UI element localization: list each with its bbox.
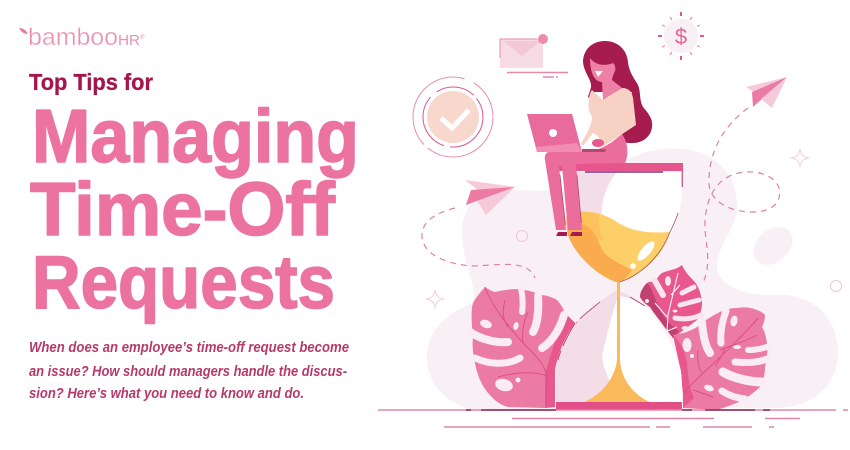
decorative rings and sparkles — [426, 149, 842, 308]
paper plane: left — [465, 180, 515, 215]
upper sand — [566, 212, 678, 282]
icon: dollar coin: $ — [675, 24, 687, 49]
icon: dollar coin — [658, 12, 704, 60]
title: Time-Off — [30, 167, 336, 251]
laptop — [527, 114, 582, 152]
title: Requests — [32, 240, 335, 324]
logo: BambooHR: ® — [140, 34, 145, 41]
dashed flight path: right — [702, 108, 780, 285]
monstera leaf: left — [470, 287, 575, 408]
icon: check badge — [413, 77, 493, 157]
monstera leaf: right — [673, 307, 769, 410]
monstera leaf: back — [640, 265, 702, 338]
lower sand — [582, 282, 652, 403]
top — [581, 88, 636, 146]
top bar — [557, 163, 683, 171]
logo: BambooHR: HR — [118, 32, 140, 49]
envelope icon — [500, 34, 568, 77]
upper bulb — [566, 172, 682, 282]
neck and face — [590, 58, 622, 100]
background blobs — [427, 148, 838, 409]
pants — [545, 134, 627, 230]
hourglass — [556, 163, 683, 410]
description text — [29, 340, 349, 402]
woman on laptop — [527, 41, 652, 236]
description text: sion? Here’s what you need to know and do. — [29, 386, 304, 402]
lower bulb — [556, 290, 682, 403]
description text: an issue? How should managers handle the discus- — [29, 364, 347, 380]
hair — [583, 41, 652, 143]
title: Managing — [32, 94, 359, 178]
paper plane: right — [746, 77, 787, 108]
dashed flight path: left — [422, 208, 535, 278]
heading: Top Tips for: Top Tips for — [29, 69, 153, 95]
shoes — [556, 232, 582, 236]
hand — [592, 139, 604, 147]
logo: BambooHR: bamboo — [28, 24, 118, 51]
bottom bar — [556, 402, 682, 410]
ground lines — [378, 410, 848, 427]
logo: BambooHR — [19, 24, 145, 51]
description text: When does an employee’s time-off request become — [29, 340, 349, 356]
title — [30, 94, 359, 324]
